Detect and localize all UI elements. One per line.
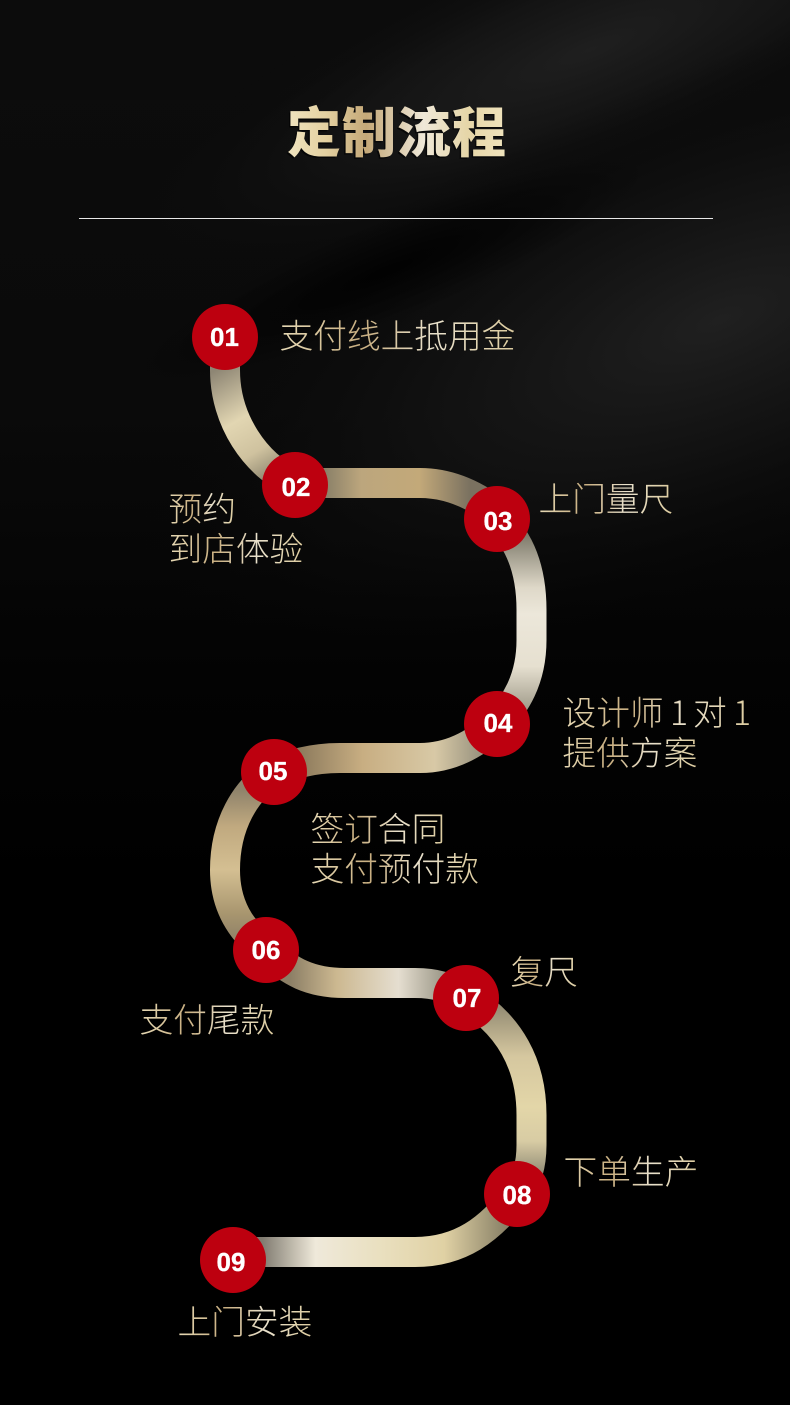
label 04: 设计师 (562, 695, 673, 733)
step 09 marker (200, 1227, 266, 1293)
step 03 marker (464, 486, 530, 552)
step 06 marker: 06 (252, 935, 280, 965)
step 05 marker: 05 (259, 756, 287, 786)
step 04 marker (464, 691, 530, 757)
step 01 marker (192, 304, 258, 370)
label 04: 1 (733, 686, 751, 735)
divider line (79, 218, 713, 219)
step 07 marker: 07 (453, 983, 481, 1013)
label 04: 1 (670, 686, 695, 735)
step 06 marker (233, 917, 299, 983)
label 05 (310, 811, 479, 889)
label 04 (562, 686, 751, 773)
label 02: 到店体验 (168, 531, 303, 569)
step 02 marker (262, 452, 328, 518)
step 01 marker: 01 (210, 322, 239, 352)
step 07 marker (433, 965, 499, 1031)
label 01: 支付线上抵用金 (280, 318, 515, 356)
label 04: 对 (693, 695, 736, 733)
label 09: 上门安装 (178, 1304, 312, 1342)
step 04 marker: 04 (484, 708, 513, 738)
step 03 marker: 03 (484, 506, 512, 536)
label 04: 提供方案 (562, 735, 697, 773)
label 02 (168, 491, 303, 569)
label 05: 签订合同 (310, 811, 445, 849)
step 08 marker: 08 (503, 1180, 531, 1210)
title: 定制流程 (286, 90, 506, 170)
step 09 marker: 09 (217, 1247, 245, 1277)
step 02 marker: 02 (282, 472, 310, 502)
label 06: 支付尾款 (140, 1002, 274, 1040)
label 03: 上门量尺 (538, 481, 673, 519)
label 02: 预约 (168, 491, 236, 529)
process path (225, 345, 532, 1252)
step 08 marker (484, 1161, 550, 1227)
label 05: 支付预付款 (310, 851, 479, 889)
title: 定制流程 (287, 89, 507, 168)
label 08: 下单生产 (564, 1154, 698, 1192)
label 07: 复尺 (510, 954, 578, 992)
step 05 marker (241, 739, 307, 805)
